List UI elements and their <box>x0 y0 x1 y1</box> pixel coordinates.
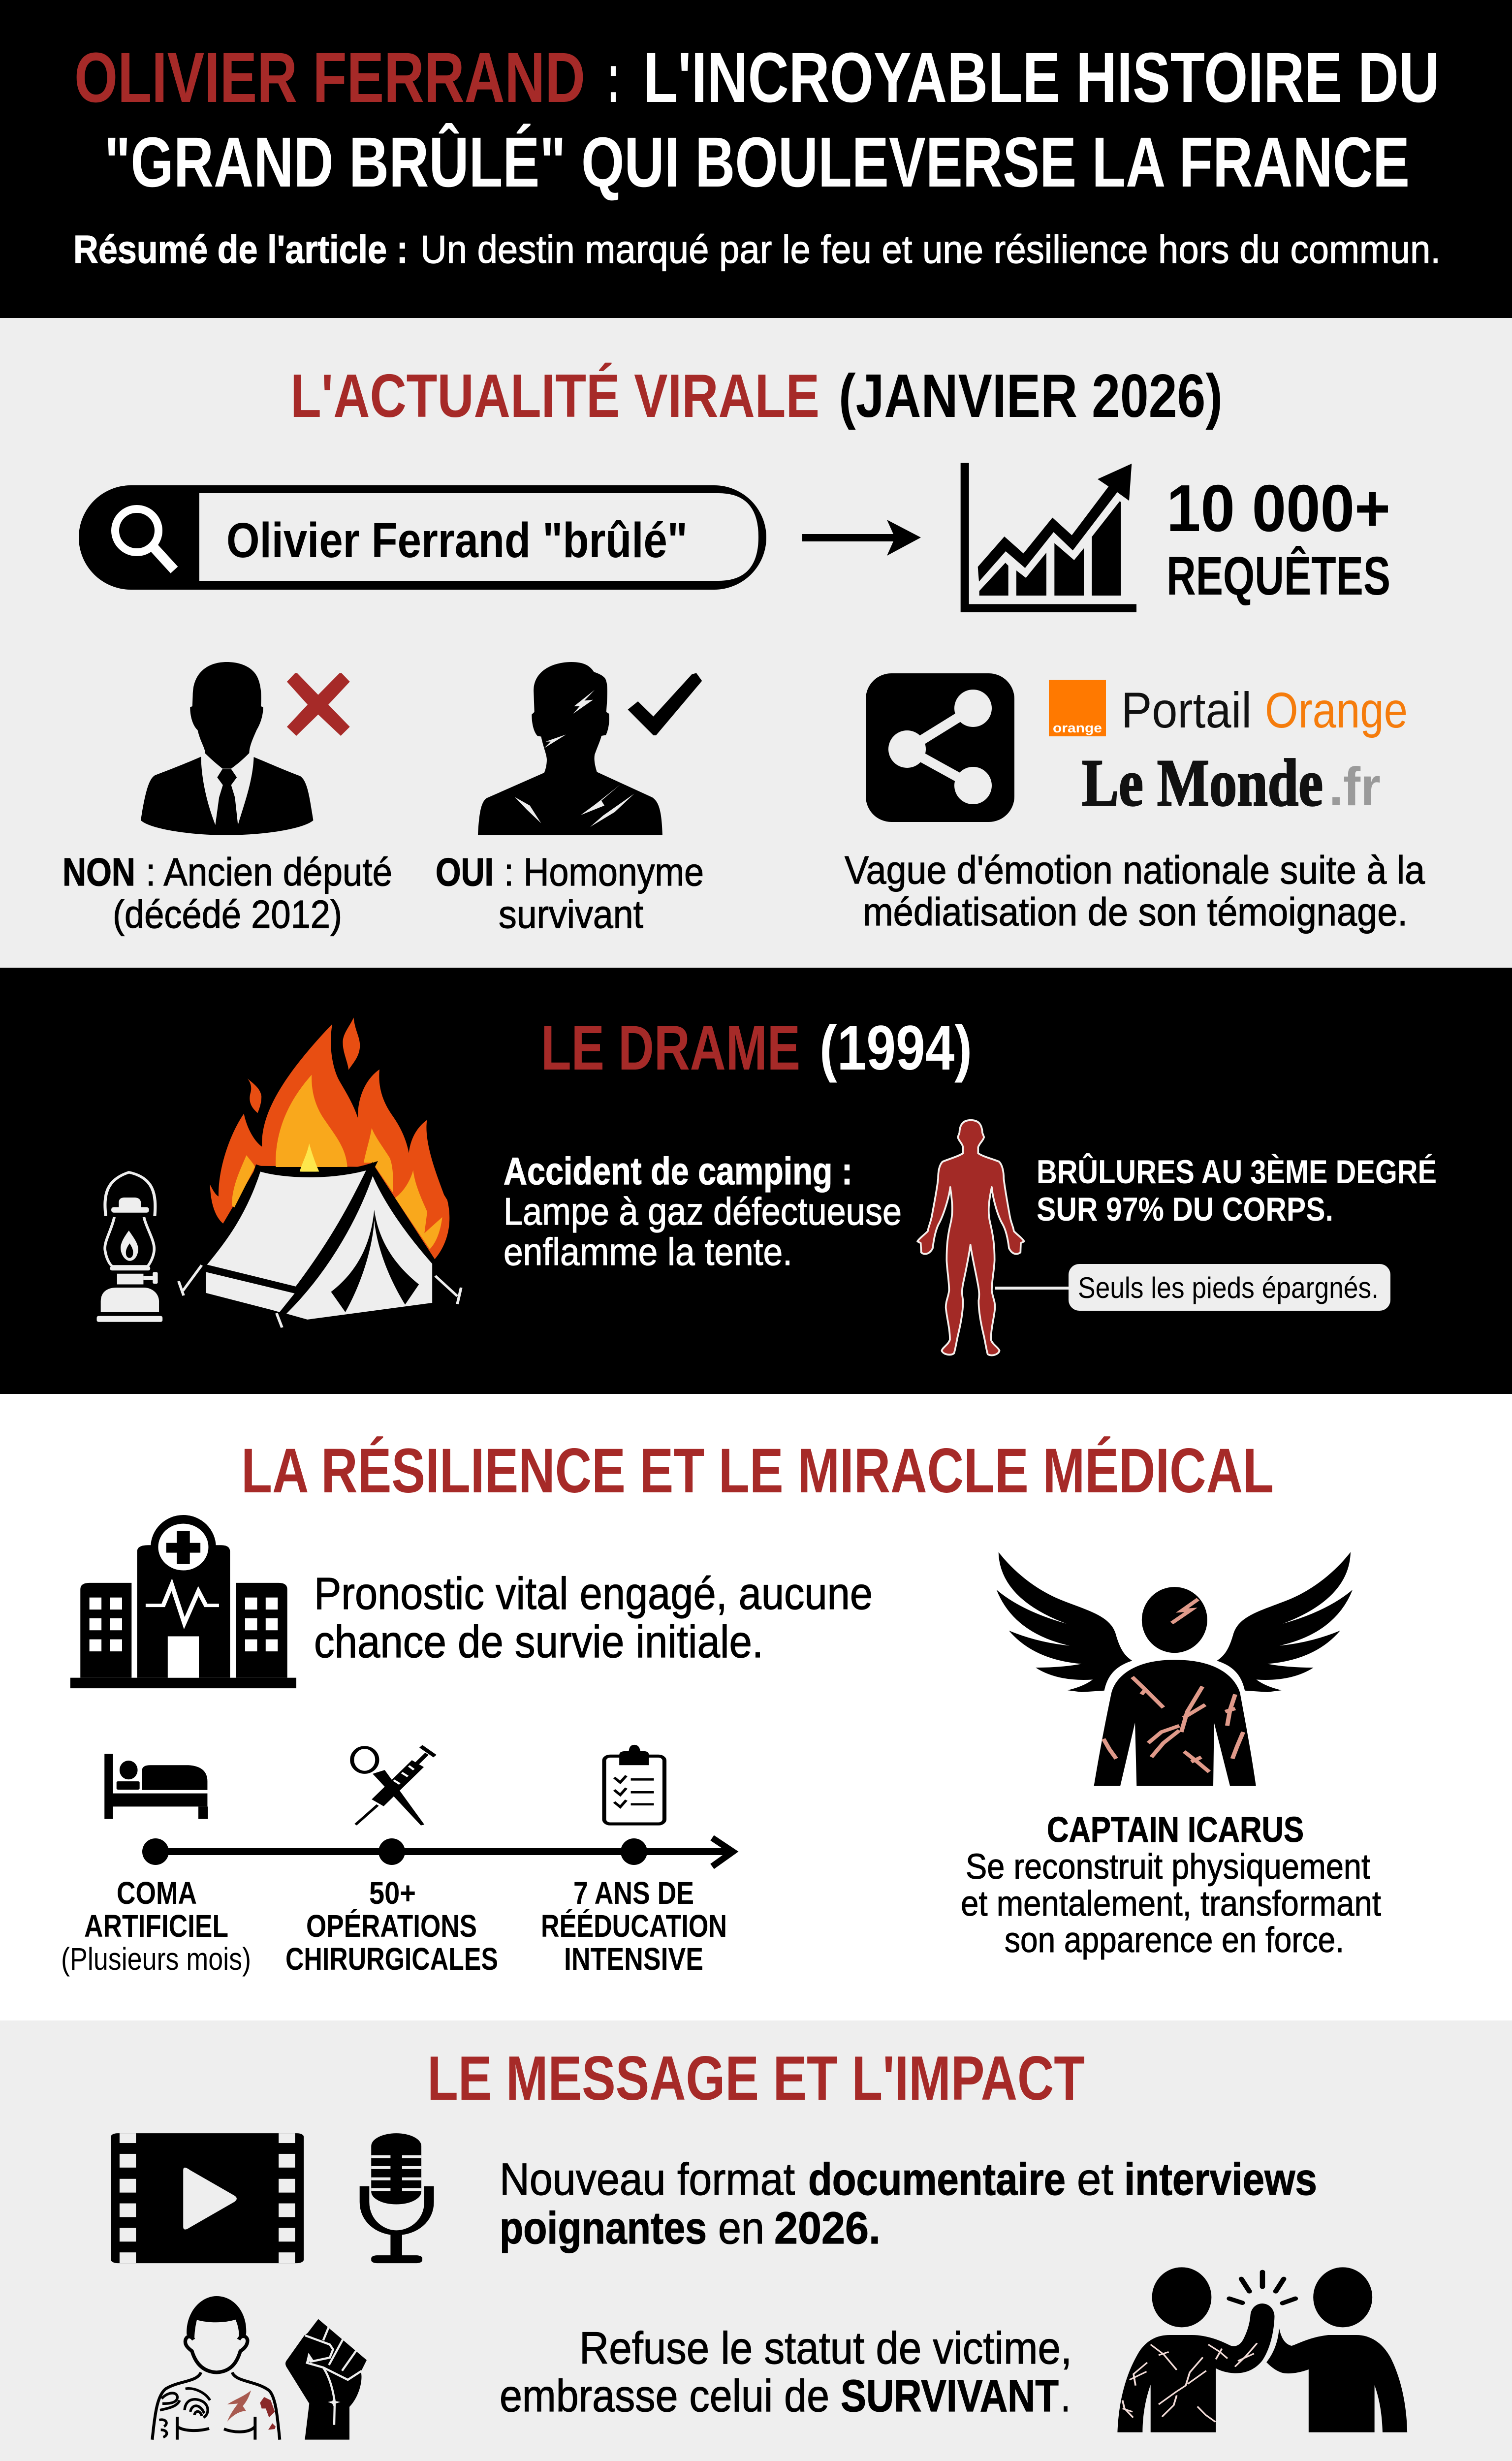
icon: winged scarred figure <box>997 1552 1353 1786</box>
text: accident de camping: Accident de camping : <box>504 1149 852 1193</box>
subtitle: Un destin marqué par le feu et une résilience hors du commun. <box>420 227 1441 271</box>
label: 7 ans de rééducation intensive: INTENSIVE <box>564 1941 703 1977</box>
heading: résilience: LA RÉSILIENCE ET LE MIRACLE MÉDICAL <box>241 1436 1274 1506</box>
logo: portail orange: orange <box>1053 721 1102 735</box>
text: accident de camping: enflamme la tente. <box>504 1230 792 1273</box>
text: oui homonyme survivant: : Homonyme <box>504 850 704 894</box>
text: refuse le statut: Refuse le statut de victime, <box>579 2323 1072 2373</box>
title: : <box>607 38 619 117</box>
text: nouveau format: documentaire <box>808 2154 1066 2205</box>
icon: gas lantern <box>97 1172 162 1322</box>
logo: portail orange <box>1049 680 1408 738</box>
heading: actualité virale: L'ACTUALITÉ VIRALE <box>290 362 819 430</box>
icon: survivant with check <box>478 662 702 835</box>
panel: actualité virale <box>0 318 1512 968</box>
panel: le drame <box>0 968 1512 1394</box>
text: oui homonyme survivant: OUI <box>436 850 494 894</box>
label: coma artificiel <box>61 1875 251 1977</box>
search bar <box>79 485 766 590</box>
text: accident de camping <box>504 1149 902 1273</box>
text: vague d'émotion: Vague d'émotion nationale suite à la <box>845 848 1425 892</box>
icon: high five <box>1117 2267 1407 2432</box>
text: captain icarus: et mentalement, transformant <box>961 1884 1381 1924</box>
icon: hospital bed <box>104 1754 208 1819</box>
icon: scalpel and syringe <box>352 1746 435 1826</box>
subtitle: Résumé de l'article : <box>73 227 408 271</box>
stat: 10 000+ requêtes <box>1166 471 1390 606</box>
icon: microphone <box>365 2133 429 2263</box>
label: 7 ans de rééducation intensive: 7 ANS DE <box>573 1875 694 1911</box>
stat: 10 000+ requêtes: REQUÊTES <box>1166 546 1390 606</box>
text: nouveau format: interviews <box>1124 2154 1317 2205</box>
label: coma artificiel: COMA <box>117 1875 197 1911</box>
text: nouveau format: et <box>1077 2154 1113 2205</box>
icon: burning tent <box>179 1017 461 1327</box>
text: brûlures au 3ème degré: BRÛLURES AU 3ÈME DEGRÉ <box>1037 1153 1437 1191</box>
label: 50+ opérations chirurgicales <box>285 1875 498 1977</box>
icon: share <box>866 673 1014 822</box>
title: OLIVIER FERRAND <box>74 38 585 117</box>
text: brûlures au 3ème degré <box>1037 1153 1437 1228</box>
icon: raised fist <box>285 2319 367 2440</box>
heading: actualité virale <box>290 362 1223 430</box>
text: refuse le statut: embrasse celui de <box>500 2371 829 2421</box>
text: nouveau format: 2026. <box>774 2203 881 2253</box>
icon: film play <box>111 2133 304 2263</box>
text: pronostic vital <box>314 1569 873 1667</box>
icon: hospital <box>70 1515 296 1688</box>
label: coma artificiel: ARTIFICIEL <box>84 1908 228 1944</box>
panel: message et impact <box>0 2020 1512 2461</box>
label: 50+ opérations chirurgicales: OPÉRATIONS <box>306 1908 477 1944</box>
text: captain icarus: Se reconstruit physiquement <box>966 1847 1370 1887</box>
logo: le monde.fr: .fr <box>1329 757 1381 817</box>
callout: seuls les pieds épargnés: Seuls les pieds épargnés. <box>1078 1271 1379 1304</box>
text: brûlures au 3ème degré: SUR 97% DU CORPS. <box>1037 1191 1333 1228</box>
timeline <box>142 1838 733 1866</box>
label: coma artificiel: (Plusieurs mois) <box>61 1941 251 1977</box>
text: nouveau format: Nouveau format <box>500 2154 795 2205</box>
heading: le drame: (1994) <box>819 1013 972 1083</box>
text: vague d'émotion <box>845 848 1425 934</box>
label: 50+ opérations chirurgicales: CHIRURGICALES <box>285 1941 498 1977</box>
text: non ancien député: (décédé 2012) <box>113 892 342 936</box>
icon: tattooed man <box>152 2296 280 2440</box>
stat: 10 000+ requêtes: 10 000+ <box>1166 471 1390 545</box>
label: 7 ans de rééducation intensive: RÉÉDUCATION <box>541 1908 727 1944</box>
text: non ancien député: NON <box>63 850 135 894</box>
text: captain icarus: son apparence en force. <box>1005 1921 1344 1960</box>
panel: résilience et miracle médical <box>0 1394 1512 2020</box>
logo: portail orange: Portail <box>1121 682 1252 738</box>
text: non ancien député <box>63 850 392 936</box>
text: vague d'émotion: médiatisation de son témoignage. <box>863 890 1408 934</box>
text: captain icarus: CAPTAIN ICARUS <box>1047 1810 1304 1850</box>
text: nouveau format: en <box>718 2203 764 2253</box>
label: 50+ opérations chirurgicales: 50+ <box>369 1875 416 1911</box>
text: refuse le statut <box>500 2323 1072 2421</box>
arrow <box>802 520 921 556</box>
icon: burned body <box>917 1120 1024 1356</box>
text: nouveau format: poignantes <box>500 2203 707 2253</box>
title <box>74 38 1440 202</box>
icon: ancien député with cross <box>141 662 350 835</box>
icon: clipboard checklist <box>604 1745 664 1824</box>
label: 7 ans de rééducation intensive <box>541 1875 727 1977</box>
search bar: Olivier Ferrand "brûlé" <box>226 513 688 568</box>
heading: actualité virale: (JANVIER 2026) <box>839 362 1223 430</box>
icon: rising chart <box>961 463 1136 612</box>
text: nouveau format <box>500 2154 1317 2253</box>
text: captain icarus <box>961 1810 1381 1960</box>
text: oui homonyme survivant <box>436 850 704 936</box>
panel: header <box>0 0 1512 318</box>
callout: seuls les pieds épargnés <box>995 1264 1390 1311</box>
heading: message et impact: LE MESSAGE ET L'IMPACT <box>427 2043 1085 2113</box>
text: refuse le statut: SURVIVANT <box>841 2371 1059 2421</box>
heading: le drame: LE DRAME <box>541 1013 800 1083</box>
text: accident de camping: Lampe à gaz défectueuse <box>504 1190 902 1233</box>
logo: portail orange: Orange <box>1265 682 1408 738</box>
text: oui homonyme survivant: survivant <box>499 892 643 936</box>
text: pronostic vital: Pronostic vital engagé, aucune <box>314 1569 873 1619</box>
text: non ancien député: : Ancien député <box>146 850 392 894</box>
text: refuse le statut: . <box>1061 2371 1071 2421</box>
logo: le monde.fr: Le Monde <box>1082 746 1323 820</box>
text: pronostic vital: chance de survie initiale. <box>314 1617 763 1667</box>
